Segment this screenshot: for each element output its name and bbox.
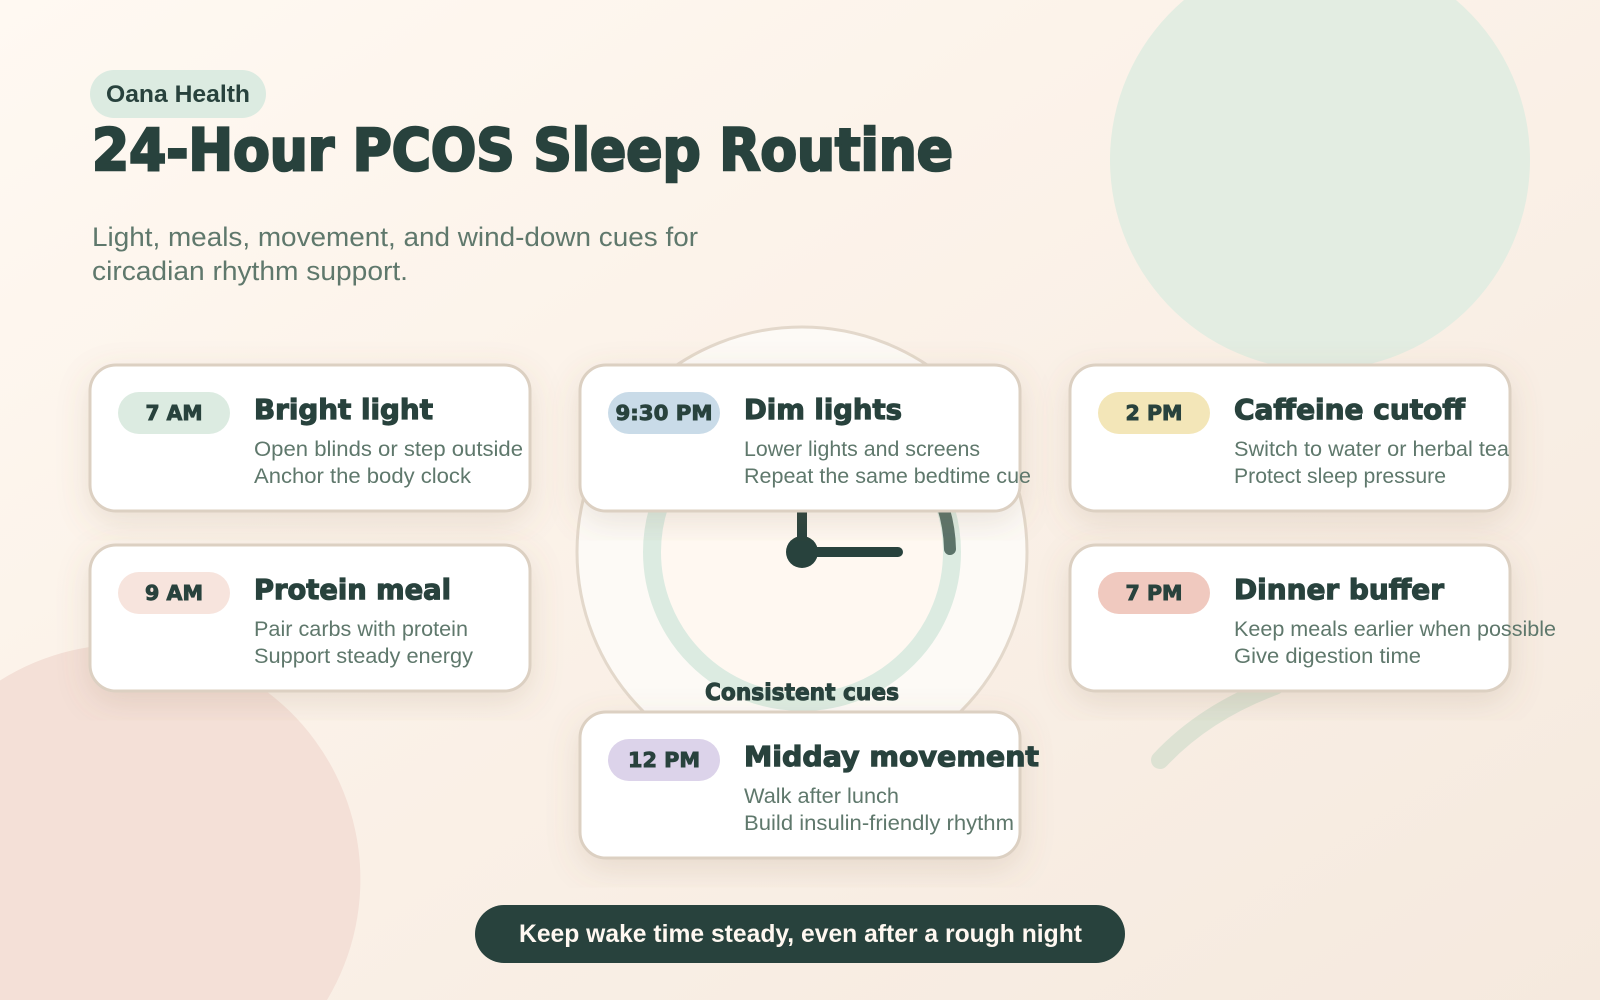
card: 7 AM: Bright light — [254, 393, 433, 426]
card: 7 AM — [90, 365, 530, 511]
card: 9 AM: Protein meal — [254, 573, 451, 606]
card: 12 PM: Build insulin-friendly rhythm — [744, 812, 1014, 835]
footer callout: Keep wake time steady, even after a rough night — [519, 920, 1083, 948]
brand pill: Oana Health — [106, 81, 250, 108]
subtitle: Light, meals, movement, and wind-down cues for — [92, 222, 698, 252]
card: 9:30 PM: Dim lights — [744, 393, 902, 426]
card: 9 AM: Support steady energy — [254, 645, 474, 668]
card: 9 AM: Pair carbs with protein — [254, 618, 468, 641]
card: 7 PM: Give digestion time — [1234, 645, 1421, 668]
clock hub — [786, 536, 818, 568]
card: 7 AM: Anchor the body clock — [254, 465, 472, 488]
clock — [577, 327, 1027, 777]
clock face — [577, 327, 1027, 777]
card: 2 PM: Protect sleep pressure — [1234, 465, 1446, 488]
card: 9 AM: 9 AM — [145, 581, 203, 605]
hour hand — [802, 547, 898, 557]
card: 12 PM: 12 PM — [628, 748, 700, 772]
clock label: Consistent cues — [705, 680, 899, 706]
card: 7 AM: 7 AM — [146, 401, 202, 425]
decorative green circle — [1110, 0, 1530, 370]
card: 12 PM — [580, 712, 1039, 858]
title: 24-Hour PCOS Sleep Routine — [92, 116, 953, 184]
card: 2 PM: Caffeine cutoff — [1234, 393, 1465, 426]
card: 2 PM — [1070, 365, 1510, 511]
subtitle — [92, 222, 698, 286]
card: 7 PM: Dinner buffer — [1234, 573, 1444, 606]
card: 7 PM — [1070, 545, 1556, 691]
card: 9:30 PM: 9:30 PM — [616, 401, 712, 425]
card: 7 PM: Keep meals earlier when possible — [1234, 618, 1556, 641]
minute hand — [797, 440, 807, 552]
clock inner dial — [661, 411, 943, 693]
card: 2 PM: 2 PM — [1126, 401, 1182, 425]
subtitle: circadian rhythm support. — [92, 256, 408, 286]
clock ring — [652, 402, 952, 702]
decorative curve — [1160, 686, 1275, 760]
card: 12 PM: Walk after lunch — [744, 785, 899, 808]
decorative pink circle — [0, 644, 360, 1000]
card: 7 PM: 7 PM — [1126, 581, 1182, 605]
card: 9:30 PM: Lower lights and screens — [744, 438, 980, 461]
card: 9:30 PM: Repeat the same bedtime cue — [744, 465, 1031, 488]
card: 12 PM: Midday movement — [744, 740, 1039, 773]
ring progress arc — [802, 403, 950, 549]
footer callout — [475, 905, 1125, 963]
brand pill — [90, 70, 266, 118]
card: 9:30 PM — [580, 365, 1031, 511]
card: 7 AM: Open blinds or step outside — [254, 438, 523, 461]
card: 9 AM — [90, 545, 530, 691]
card: 2 PM: Switch to water or herbal tea — [1234, 438, 1509, 461]
